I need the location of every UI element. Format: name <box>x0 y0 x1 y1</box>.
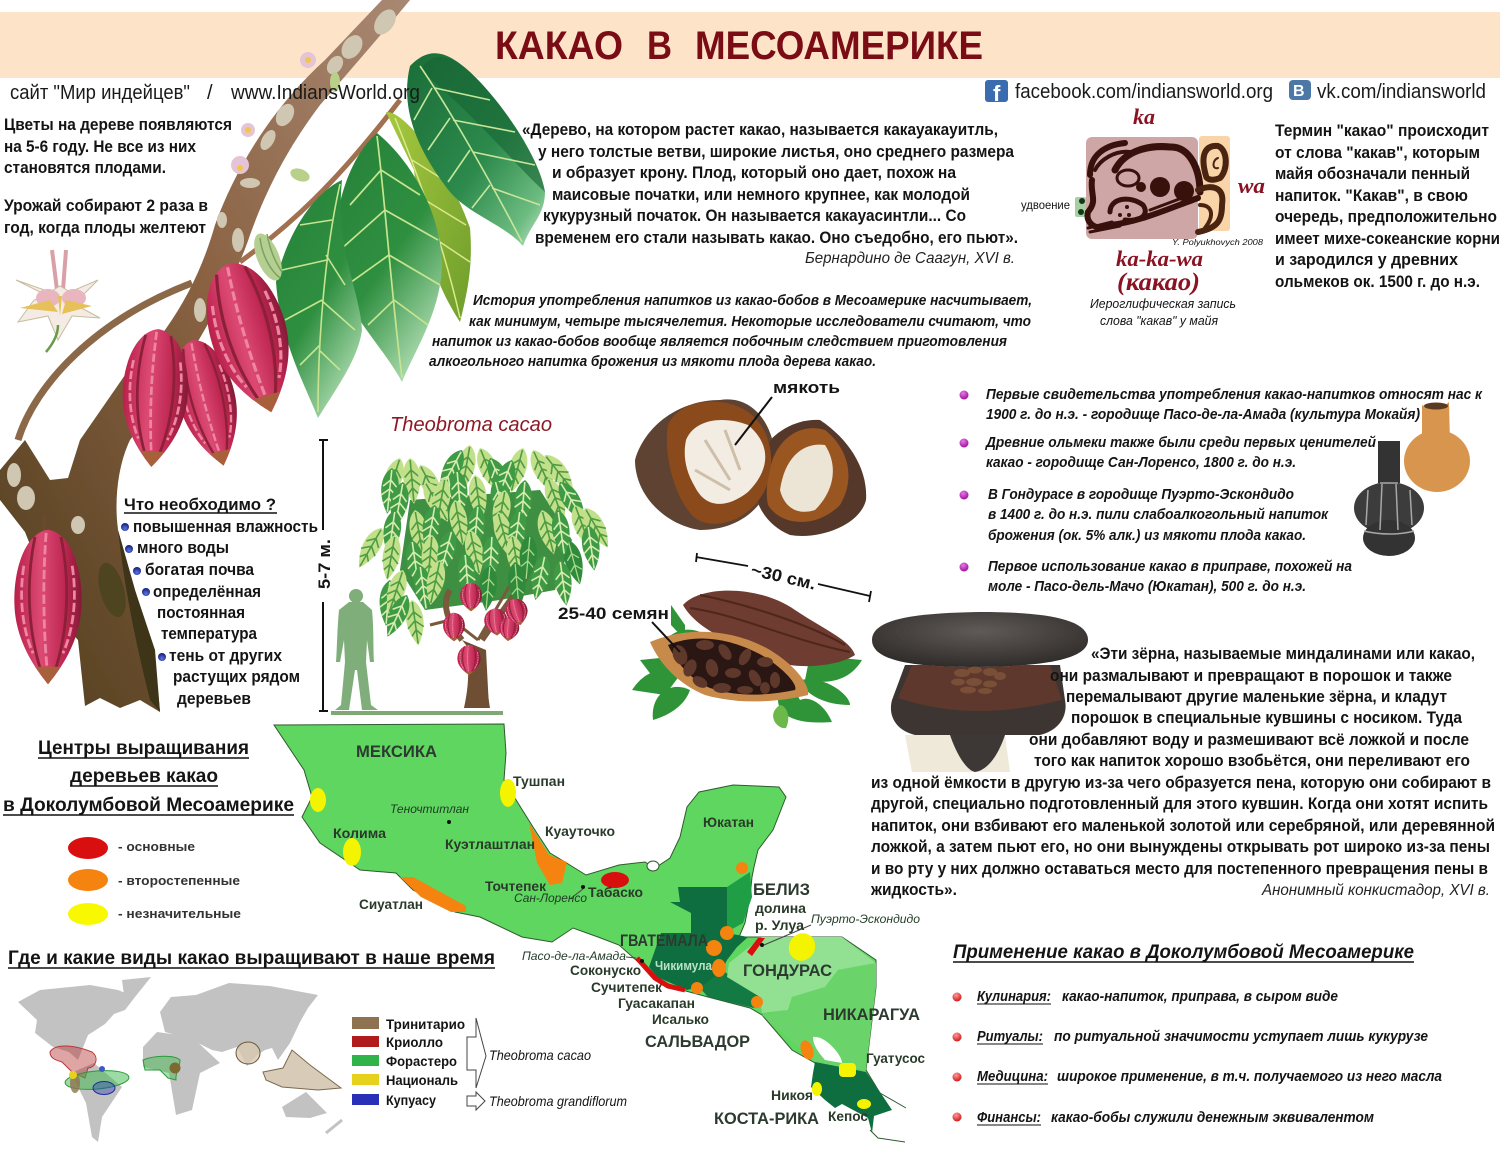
label: seeds count: 25-40 семян <box>558 604 669 623</box>
legend: centre importance: - основные <box>118 839 195 854</box>
place dots and leaders <box>447 820 811 963</box>
map place names: Сиуатлан <box>359 896 423 912</box>
title band: МЕСОАМЕРИКЕ <box>695 24 983 68</box>
text: history of cacao drinks <box>429 292 1032 370</box>
map place names: Точтепек <box>485 878 547 894</box>
map place names: ГОНДУРАС <box>743 961 832 980</box>
heading: growing centres: деревьев какао <box>70 766 218 787</box>
panel: uses of cacao: Медицина: <box>977 1068 1048 1085</box>
map place names <box>333 742 925 1128</box>
map place names: НИКАРАГУА <box>823 1005 920 1024</box>
species name: Theobroma cacao <box>390 414 552 436</box>
dimension: pod length <box>696 553 871 602</box>
yellow areas <box>310 779 871 1109</box>
panel: uses of cacao: широкое применение, в т.ч. получаемого из него масла <box>1057 1068 1442 1085</box>
map place names: Юкатан <box>703 814 754 830</box>
panel: uses of cacao: по ритуальной значимости уступает лишь кукурузе <box>1054 1028 1428 1045</box>
Maya hieroglyph ka-ka-wa: удвоение <box>1021 198 1070 212</box>
legend: centre importance: - незначительные <box>118 906 241 921</box>
heading: varieties today: Где и какие виды какао выращивают в наше время <box>8 948 495 969</box>
text: history of cacao drinks: алкогольного напитка брожения из мякоти плода дерева какао. <box>429 353 876 370</box>
quote: anonymous conquistador: порошок в специальные кувшины с носиком. Туда <box>1071 708 1462 727</box>
needs list: Что необходимо ? <box>124 495 276 514</box>
quote: Sahagun: «Дерево, на котором растет какао, называется какауакауитль, <box>522 120 998 139</box>
Costa Rica <box>811 1062 892 1133</box>
legend: cacao varieties: Криолло <box>386 1034 443 1050</box>
dimension: pod length: ~30 см. <box>749 560 818 594</box>
photo: opened cacao pod <box>635 397 866 536</box>
blossoms on branch <box>231 52 340 184</box>
needs list: деревьев <box>177 689 251 708</box>
panel: uses of cacao: Кулинария: <box>977 988 1051 1005</box>
cacao pods <box>14 253 308 684</box>
text: flowering and harvest: становятся плодами. <box>4 158 166 177</box>
social links <box>985 80 1486 106</box>
Maya hieroglyph ka-ka-wa: Иероглифическая запись <box>1090 297 1236 311</box>
heading: growing centres <box>3 738 294 816</box>
needs list: тень от других <box>169 646 282 665</box>
quote: Sahagun <box>522 120 1018 267</box>
needs list: повышенная влажность <box>133 517 318 536</box>
illustration: cacao branch with leaves and pods <box>0 0 545 712</box>
text: term origin: майя обозначали пенный <box>1275 164 1470 183</box>
text: term origin: и зародился у древних <box>1275 250 1459 269</box>
height scale <box>315 440 334 711</box>
Nicaragua <box>762 963 876 1070</box>
trunk and branches <box>0 0 410 712</box>
map place names: Куауточко <box>545 823 615 839</box>
timeline list: какао - городище Сан-Лоренсо, 1800 г. до н.э. <box>986 454 1296 471</box>
Maya hieroglyph ka-ka-wa: Y. Polyukhovych 2008 <box>1172 238 1264 247</box>
map place names: Кепос <box>828 1108 868 1124</box>
panel: uses of cacao <box>952 942 1442 1126</box>
map place names: МЕКСИКА <box>356 742 437 761</box>
legend: cacao varieties: Форастеро <box>386 1053 457 1069</box>
map place names: Тушпан <box>513 773 565 789</box>
social links: В <box>1293 83 1305 100</box>
timeline list: брожения (ок. 5% алк.) из мякоти плода какао. <box>988 527 1306 544</box>
needs list: определённая <box>153 582 261 601</box>
text: flowering and harvest: Цветы на дереве появляются <box>4 115 232 134</box>
map place names: Теночтитлан <box>390 804 470 816</box>
map place names: долина <box>755 900 806 916</box>
needs list: растущих рядом <box>173 667 300 686</box>
panel: uses of cacao: какао-напиток, приправа, в сыром виде <box>1062 988 1338 1005</box>
timeline list: в 1400 г. до н.э. пили слабоалкогольный напиток <box>988 506 1329 523</box>
text: term origin <box>1275 121 1500 291</box>
text: flowering and harvest <box>4 115 232 237</box>
timeline list: Первое использование какао в приправе, похожей на <box>988 558 1352 575</box>
cacao tree <box>352 444 615 708</box>
needs list: много воды <box>137 538 229 557</box>
heading: growing centres: Центры выращивания <box>38 738 249 759</box>
timeline list: В Гондурасе в городище Пуэрто-Эскондидо <box>988 486 1294 503</box>
quote: Sahagun: временем его стали называть какао. Оно съедобно, его пьют». <box>535 228 1018 247</box>
legend: cacao varieties: Националь <box>386 1072 458 1088</box>
timeline list: моле - Пасо-дель-Мачо (Юкатан), 500 г. до н.э. <box>988 578 1306 595</box>
legend: cacao varieties: Тринитарио <box>386 1016 465 1032</box>
leaf: left <box>276 180 362 418</box>
Maya hieroglyph ka-ka-wa: (какао) <box>1117 269 1200 296</box>
social links: facebook.com/indiansworld.org <box>1015 81 1273 103</box>
text: term origin: от слова "какав", которым <box>1275 143 1480 162</box>
panel: uses of cacao: Применение какао в Доколумбовой Месоамерике <box>953 942 1414 963</box>
map place names: Куэтлаштлан <box>445 836 535 852</box>
site line: / <box>207 82 213 104</box>
title band: КАКАО <box>495 24 623 68</box>
text: term origin: ольмеков ок. 1500 г. до н.э. <box>1275 272 1480 291</box>
map place names: Пасо-де-ла-Амада <box>522 951 626 963</box>
quote: anonymous conquistador: Анонимный конкистадор, XVI в. <box>1261 882 1490 899</box>
social links: vk.com/indiansworld <box>1317 81 1486 103</box>
text: flowering and harvest: Урожай собирают 2 раза в <box>4 196 208 215</box>
timeline list: 1900 г. до н.э. - городище Пасо-де-ла-Амада (культура Мокайя) <box>986 406 1420 423</box>
quote: Sahagun: у него толстые ветви, широкие листья, оно среднего размера <box>538 142 1014 161</box>
quote: anonymous conquistador: перемалывают другие маленькие зёрна, и кладут <box>1066 687 1447 706</box>
timeline list <box>960 386 1483 595</box>
photo: stone metate <box>872 612 1088 772</box>
map place names: ГВАТЕМАЛА <box>620 931 708 950</box>
quote: Sahagun: маисовые початки, или немного крупнее, как молодой <box>552 185 970 204</box>
vessels: orange and black jars <box>1354 402 1470 556</box>
legend: centre importance <box>68 837 241 925</box>
title band <box>0 12 1500 78</box>
world map <box>18 977 342 1142</box>
heading: growing centres: в Доколумбовой Месоамерике <box>3 795 294 816</box>
lakes <box>813 1037 842 1063</box>
Maya hieroglyph ka-ka-wa: ka-ka-wa <box>1116 246 1203 271</box>
text: history of cacao drinks: как минимум, четыре тысячелетия. Некоторые исследователи считают, что <box>469 313 1031 330</box>
title band: В <box>647 24 672 68</box>
leaf: yellow <box>386 112 471 322</box>
site line: www.IndiansWorld.org <box>230 82 420 104</box>
label: pulp: мякоть <box>773 378 840 397</box>
ground line <box>331 711 503 715</box>
map place names: Гуатусос <box>866 1050 925 1066</box>
Honduras <box>727 937 876 1013</box>
timeline list: Древние ольмеки также были среди первых ценителей <box>984 434 1376 451</box>
height scale: 5-7 м. <box>315 539 334 589</box>
Maya hieroglyph ka-ka-wa: слова "какав" у майя <box>1100 314 1218 328</box>
legend: cacao varieties: Theobroma cacao <box>489 1047 591 1063</box>
El Salvador <box>700 970 760 1008</box>
map place names: Пуэрто-Эскондидо <box>811 914 921 926</box>
text: history of cacao drinks: История употребления напитков из какао-бобов в Месоамерике насчитывает, <box>473 292 1032 309</box>
text: term origin: напиток. "Какав", в свою <box>1275 186 1468 205</box>
legend: cacao varieties: Theobroma grandiflorum <box>489 1093 627 1109</box>
quote: Sahagun: Бернардино де Саагун, XVI в. <box>805 250 1015 267</box>
map place names: Чикимула <box>655 959 713 973</box>
photo: cacao pod with beans <box>632 591 862 728</box>
needs list: постоянная <box>157 603 245 622</box>
panel: uses of cacao: какао-бобы служили денежным эквивалентом <box>1051 1109 1374 1126</box>
flower illustration <box>16 250 100 352</box>
quote: Sahagun: кукурузный початок. Он называется какауасинтли... Со <box>543 206 966 225</box>
map place names: БЕЛИЗ <box>753 880 810 899</box>
text: flowering and harvest: год, когда плоды желтеют <box>4 218 206 237</box>
social links: f <box>993 81 1001 106</box>
quote: anonymous conquistador: жидкость». <box>870 880 957 899</box>
Maya hieroglyph ka-ka-wa <box>1021 104 1265 328</box>
human silhouette <box>335 589 378 710</box>
text: history of cacao drinks: напиток из какао-бобов вообще является побочным следствием приготовления <box>432 333 1007 350</box>
map place names: Никоя <box>771 1087 813 1103</box>
small green fruit <box>248 230 288 284</box>
orange areas <box>400 823 816 1061</box>
map place names: Табаско <box>588 884 643 900</box>
panel: uses of cacao: Ритуалы: <box>977 1028 1043 1045</box>
text: flowering and harvest: на 5-6 году. Не все из них <box>4 137 196 156</box>
Belize <box>727 872 752 932</box>
Maya hieroglyph ka-ka-wa: ka <box>1133 104 1155 129</box>
Maya hieroglyph ka-ka-wa: wa <box>1238 173 1265 198</box>
panel: uses of cacao: Финансы: <box>977 1109 1041 1126</box>
legend: cacao varieties <box>352 1016 627 1110</box>
map of Mesoamerica <box>274 724 925 1142</box>
map place names: Колима <box>333 825 386 841</box>
map place names: Гуасакапан <box>618 995 695 1011</box>
quote: anonymous conquistador: они размалывают и превращают в порошок и также <box>1050 666 1452 685</box>
needs list: богатая почва <box>145 560 254 579</box>
quote: anonymous conquistador: того как напиток хорошо взобьётся, они переливают его <box>1034 751 1470 770</box>
site line: сайт "Мир индейцев" <box>10 82 190 104</box>
red areas <box>601 872 765 990</box>
needs list <box>121 495 318 708</box>
quote: Sahagun: и образует крону. Плод, который оно дает, похож на <box>552 163 956 182</box>
map place names: КОСТА-РИКА <box>714 1109 819 1128</box>
map place names: Сан-Лоренсо <box>514 893 588 905</box>
quote: anonymous conquistador <box>870 644 1495 899</box>
leaf: centre <box>335 133 442 382</box>
Guatemala <box>649 887 748 990</box>
map place names: р. Улуа <box>755 917 804 933</box>
needs list: температура <box>161 624 257 643</box>
legend: centre importance: - второстепенные <box>118 873 240 888</box>
map place names: Сучитепек <box>591 979 663 995</box>
leaf: top right <box>407 53 545 246</box>
map place names: Соконуско <box>570 962 641 978</box>
site line <box>10 82 420 104</box>
quote: anonymous conquistador: они добавляют воду и размешивают всё ложкой и после <box>1029 730 1469 749</box>
map place names: Исалько <box>652 1011 709 1027</box>
legend: cacao varieties: Купуасу <box>386 1092 436 1108</box>
map place names: САЛЬВАДОР <box>645 1032 750 1051</box>
